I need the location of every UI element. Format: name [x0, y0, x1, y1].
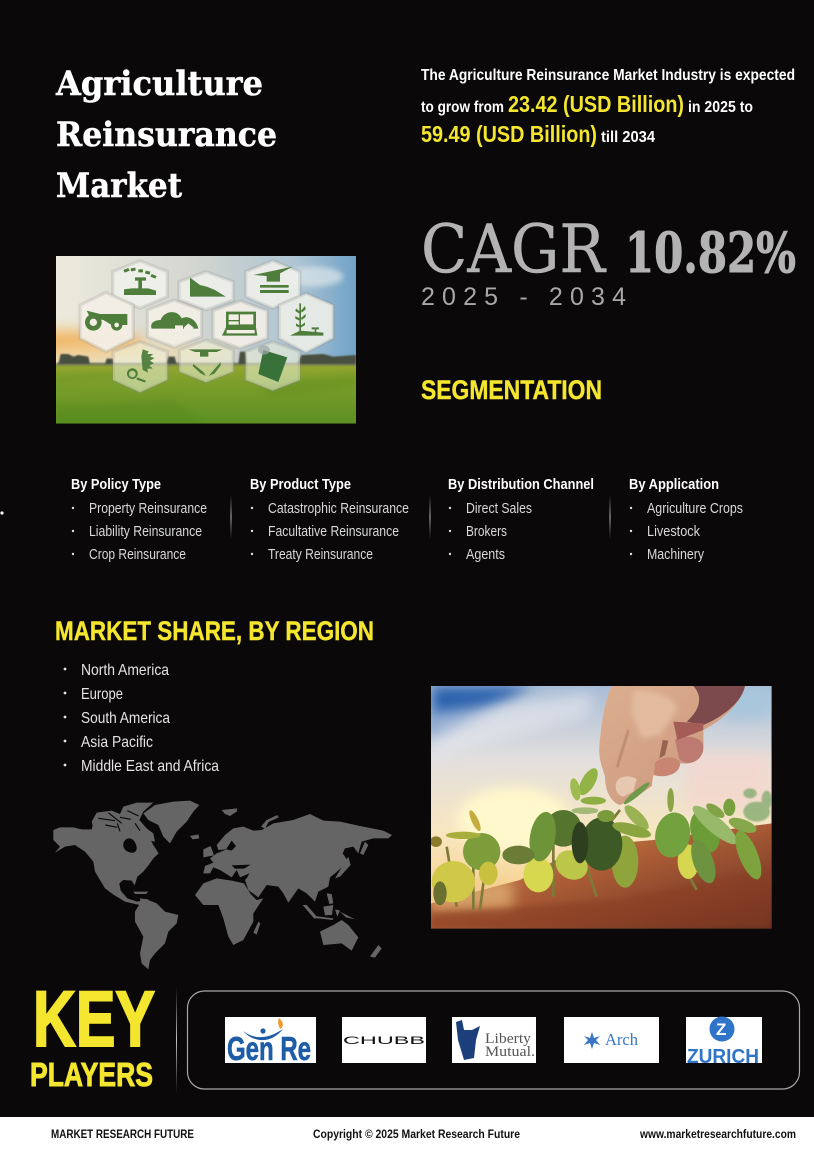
region list: South America [81, 710, 170, 727]
eurasia [203, 814, 392, 903]
logo: Liberty Mutual: Liberty [485, 1031, 532, 1047]
segmentation columns [0, 476, 743, 563]
soil [431, 823, 772, 929]
world map [53, 801, 392, 969]
southeast asia islands [303, 893, 355, 920]
photo: hand touching seedlings at sunrise [430, 686, 772, 929]
british isles [203, 846, 214, 857]
key players heading: PLAYERS [30, 1056, 153, 1093]
segmentation heading: SEGMENTATION [421, 375, 602, 405]
key players heading: KEY [33, 974, 155, 1063]
hexagon icons [85, 267, 323, 383]
logo: Zurich: ZURICH [687, 1046, 759, 1068]
region list: Europe [81, 686, 123, 703]
svalbard [222, 808, 237, 816]
region list [64, 662, 219, 775]
australia [320, 920, 358, 951]
column: by product type: Treaty Reinsurance [268, 546, 373, 563]
logo: Arch: Arch [605, 1030, 638, 1049]
column: by product type: Catastrophic Reinsurance [268, 500, 409, 517]
market forecast text: till 2034 [601, 129, 655, 146]
column: by distribution channel: Direct Sales [466, 500, 532, 517]
footer bar: MARKET RESEARCH FUTURE [51, 1127, 194, 1141]
seedling stems [447, 810, 697, 910]
column: by product type: Facultative Reinsurance [268, 523, 399, 540]
key players heading [30, 974, 155, 1093]
footer bar: Copyright © 2025 Market Research Future [313, 1127, 520, 1141]
caribbean islands [133, 892, 148, 901]
logo: Zurich: Z [716, 1020, 726, 1039]
region list: Middle East and Africa [81, 758, 219, 775]
column: by distribution channel: By Distribution Channel [448, 476, 594, 493]
new zealand [370, 945, 382, 958]
logo: Arch [564, 1017, 659, 1063]
column: by product type [250, 476, 409, 563]
title: Market [56, 166, 182, 206]
column: by application: Machinery [647, 546, 704, 563]
logo: Chubb [342, 1017, 426, 1063]
column: by policy type: By Policy Type [71, 476, 161, 493]
CAGR figure: 2025 - 2034 [421, 283, 626, 311]
column: by distribution channel: Agents [466, 546, 505, 563]
CAGR figure: CAGR [421, 211, 607, 288]
tree line [56, 352, 356, 366]
logo: Gen Re: Gen Re [227, 1030, 311, 1067]
stray dot [0, 511, 4, 515]
logo: Zurich [686, 1016, 762, 1068]
iceland [190, 834, 199, 839]
north america [53, 820, 159, 905]
CAGR figure [421, 211, 796, 311]
column: by policy type: Property Reinsurance [89, 500, 207, 517]
logo: Chubb: CHUBB [343, 1035, 425, 1047]
field texture [60, 374, 356, 394]
madagascar [253, 922, 260, 935]
column: by application: Agriculture Crops [647, 500, 743, 517]
novaya zemlya [261, 815, 279, 829]
south america [135, 899, 178, 969]
logo: Gen Re [225, 1017, 316, 1067]
market forecast text [421, 67, 795, 147]
column: by product type: By Product Type [250, 476, 351, 493]
column: by application: Livestock [647, 523, 700, 540]
hand [599, 686, 745, 805]
market forecast text: to grow from [421, 99, 504, 116]
logo: Liberty Mutual [452, 1017, 536, 1063]
title: Reinsurance [56, 115, 277, 155]
photo: smart farming hexagons over field [56, 256, 356, 424]
market forecast text: in 2025 to [688, 99, 753, 116]
market share heading: MARKET SHARE, BY REGION [55, 616, 374, 646]
seedling leaves [430, 765, 767, 905]
title: Agriculture [55, 64, 263, 104]
column: by distribution channel [448, 476, 594, 563]
market forecast text: 59.49 (USD Billion) [421, 121, 597, 147]
column: by policy type [71, 476, 207, 563]
far right plant [743, 788, 772, 822]
africa [195, 878, 263, 945]
key players logo panel [188, 991, 800, 1089]
footer bar [0, 1117, 814, 1150]
region list: Asia Pacific [81, 734, 153, 751]
arctic islands [92, 803, 155, 842]
market forecast text: 23.42 (USD Billion) [508, 91, 684, 117]
column: by policy type: Liability Reinsurance [89, 523, 202, 540]
column: by application: By Application [629, 476, 719, 493]
title [55, 64, 277, 206]
hexagon icon grid [80, 261, 333, 392]
column: by policy type: Crop Reinsurance [89, 546, 186, 563]
logo: Liberty Mutual: Mutual. [485, 1044, 535, 1060]
column: by application [629, 476, 743, 563]
region list: North America [81, 662, 169, 679]
column: by distribution channel: Brokers [466, 523, 507, 540]
japan and sakhalin [335, 842, 368, 878]
greenland [143, 801, 199, 843]
